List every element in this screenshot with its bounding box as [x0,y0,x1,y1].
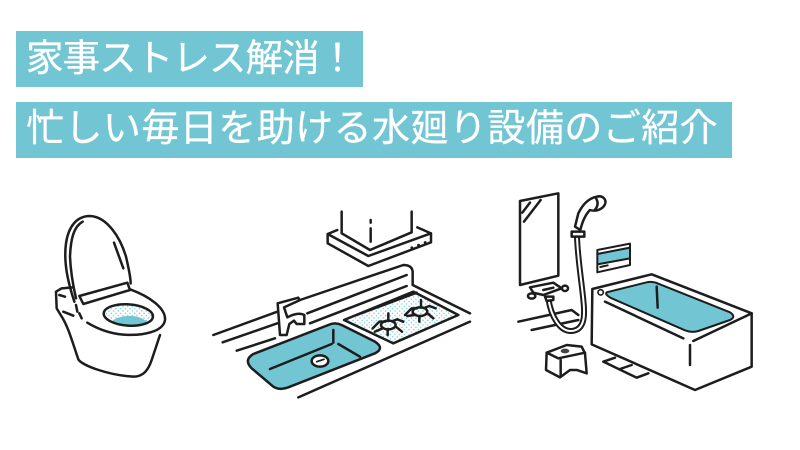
title banner line 2: 忙しい毎日を助ける水廻り設備のご紹介 [26,108,718,150]
control panel [597,244,630,272]
icon: bathroom with mirror, shower and bathtub [518,193,752,390]
title banner line 1: 家事ストレス解消！ [26,37,355,79]
sink [248,323,380,389]
icon: kitchen with range hood, sink and stove [213,212,470,397]
toilet bowl [103,303,154,327]
faucet [278,298,304,335]
range hood [328,212,431,266]
shower valve [528,283,568,301]
stool [546,345,587,377]
burner right [405,300,436,322]
stove [344,292,458,343]
bathtub [592,274,752,390]
shower head [575,196,605,230]
burner left [373,313,403,335]
floor lines [518,310,578,330]
countertop [213,265,470,397]
bath mat [603,358,648,378]
icon: toilet [56,216,165,377]
shower hose [548,237,584,331]
mirror [520,193,558,285]
